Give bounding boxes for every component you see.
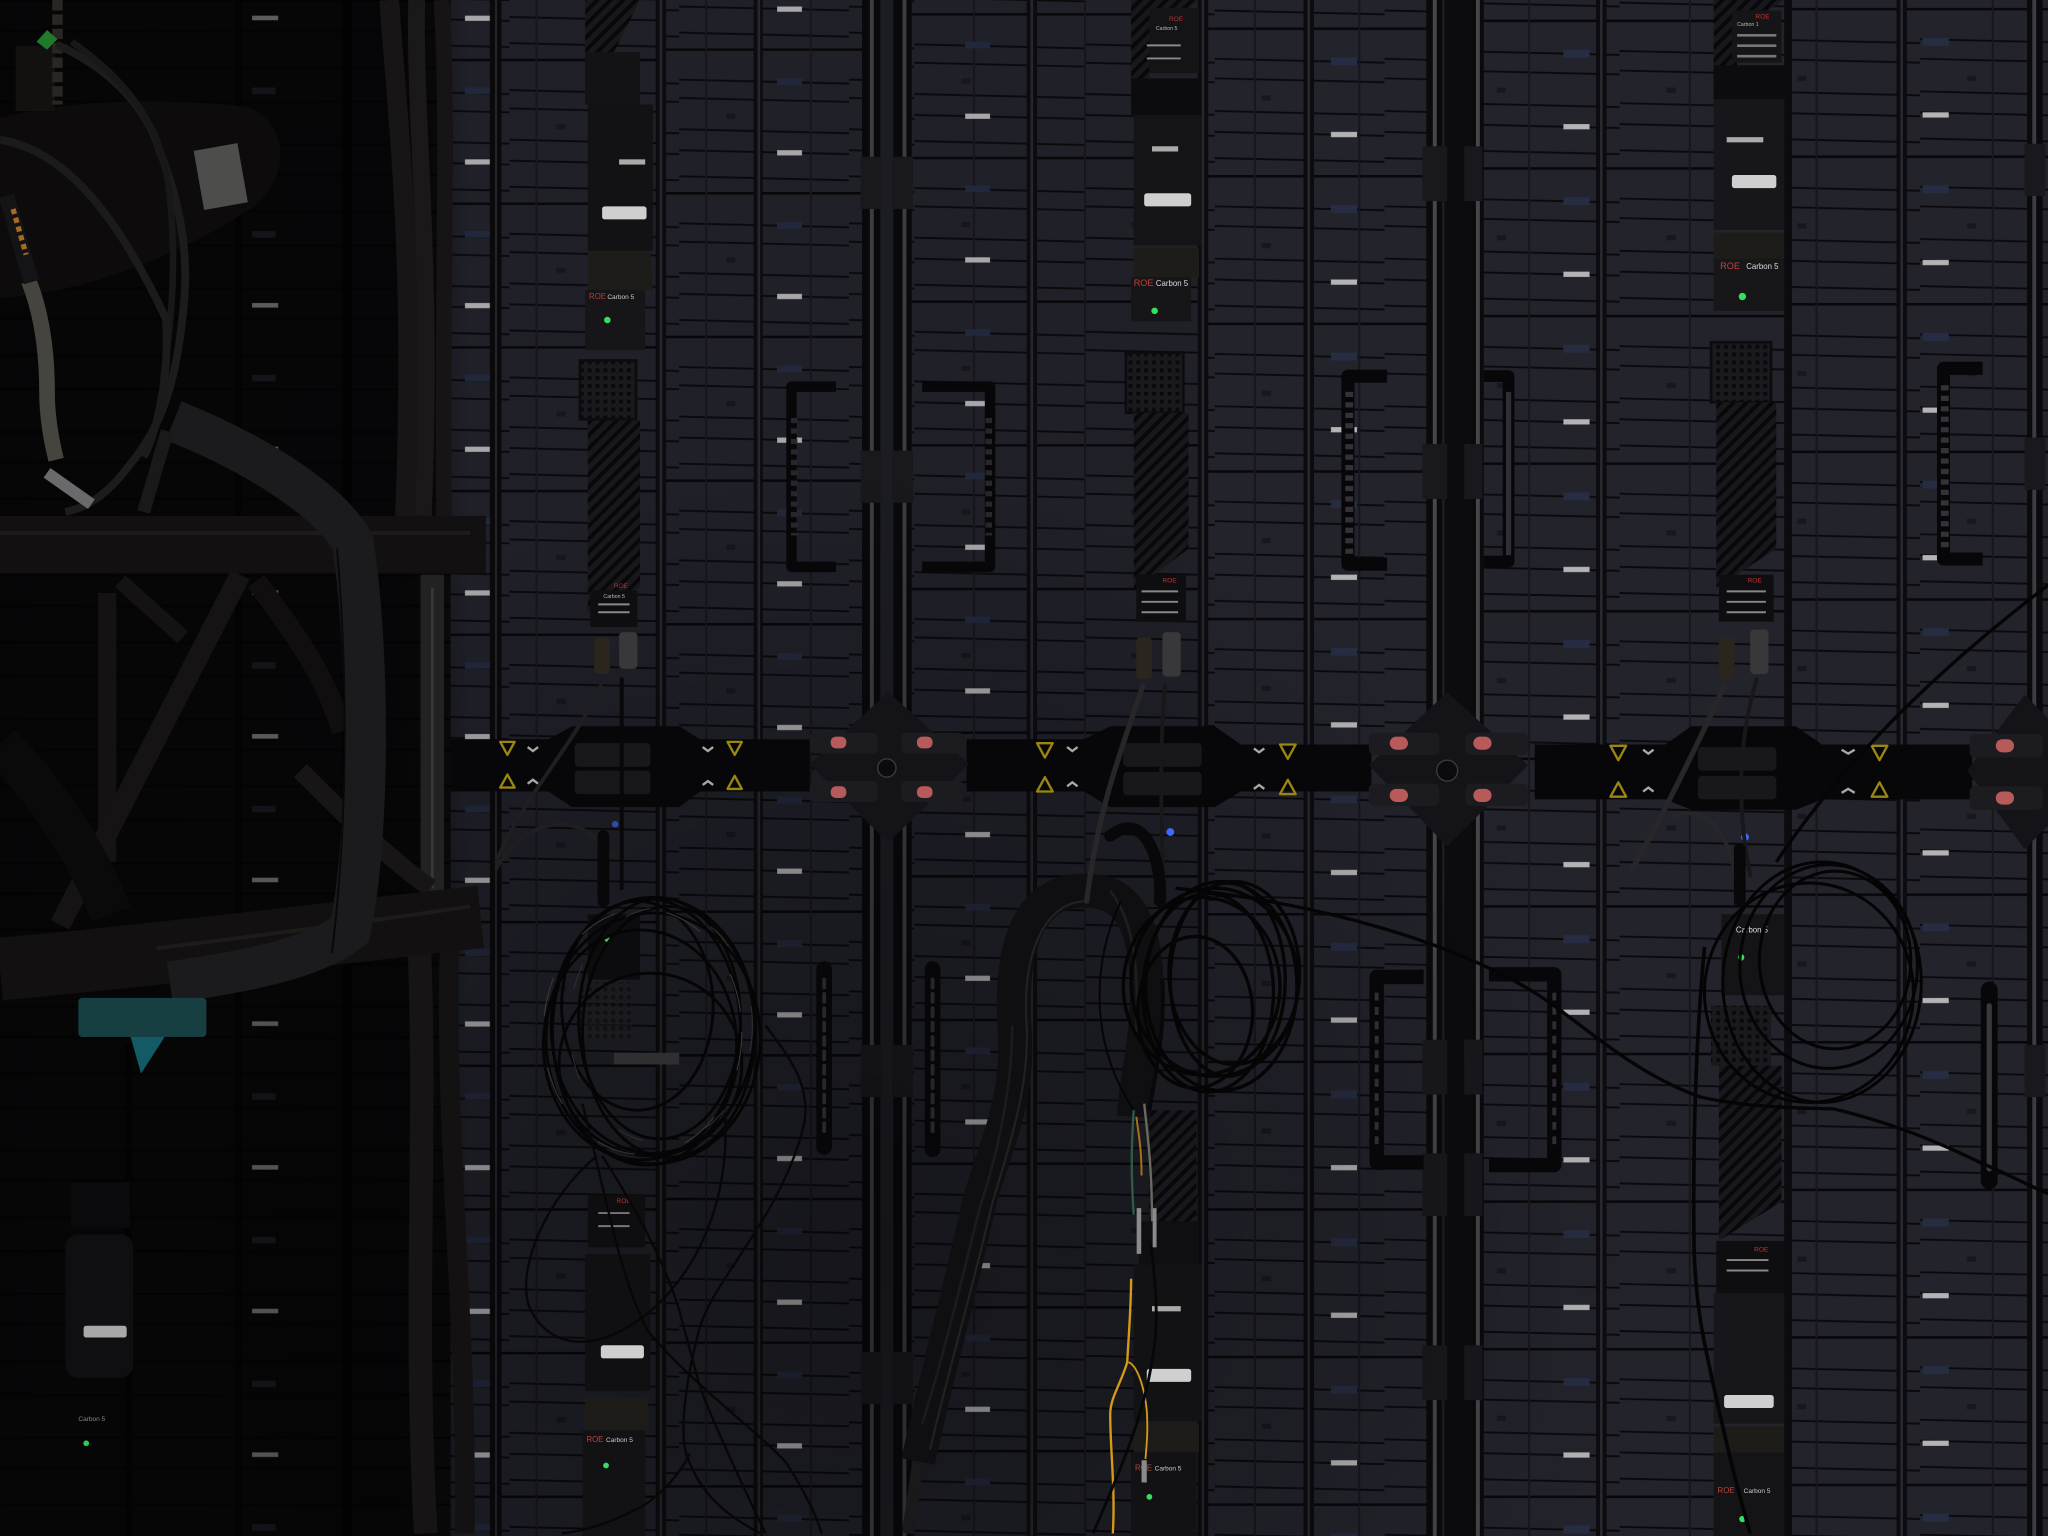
blue status lights [612, 821, 1749, 841]
processor column 2 [1126, 0, 1202, 622]
processor column 2: ROE [1134, 278, 1153, 288]
latch cross 3 [1967, 695, 2048, 849]
processor column 3 lower: ROE [1754, 1246, 1769, 1253]
grey power cables from connectors [496, 679, 1757, 901]
handle pair: upper left [792, 387, 990, 567]
black cables around hoist [0, 42, 185, 512]
vertical hanging cables [389, 0, 465, 1533]
processor column 3 lower: Carbon 5 [1744, 1488, 1771, 1495]
grey cable with orange tape [7, 196, 91, 504]
processor column 1: ROE [614, 583, 629, 590]
processor column 1: Carbon 5 [603, 594, 625, 600]
processor column 3: ROE [1748, 578, 1762, 585]
truss [0, 533, 486, 969]
teal tag on truss [78, 998, 206, 1074]
handle pair: upper centre [1348, 376, 1509, 564]
latch cross 1 [810, 692, 969, 842]
latch cross 2 [1369, 692, 1528, 846]
cable coil right [1704, 862, 1921, 1102]
connector block [594, 630, 1768, 679]
processor column 3 lower: Carbon 5 [1736, 926, 1769, 935]
processor column 1 lower: ROE [586, 1435, 603, 1444]
cable coil left [543, 897, 760, 1165]
vertical rails [490, 0, 2043, 1536]
loose wires under left coil [526, 1025, 822, 1533]
long loose cables [1176, 585, 2048, 1533]
rail brackets [861, 144, 2045, 1404]
processor column 3: Carbon 5 [1746, 262, 1779, 271]
processor column 2 lower: Carbon 5 [1155, 1466, 1182, 1473]
horizontal joining bars [451, 726, 1972, 810]
processor column 3 lower: ROE [1718, 1486, 1735, 1495]
ratchet strap [170, 421, 365, 982]
processor column 0 lower left [65, 1182, 133, 1446]
processor column 1 [580, 0, 653, 627]
white chevrons [528, 747, 1855, 793]
processor column 1 lower [577, 914, 650, 1536]
dark left section of wall [0, 0, 470, 1536]
fibre breakout with coloured strands [1093, 1104, 1156, 1533]
cable coil centre [1100, 882, 1300, 1110]
processor column 2 lower: ROE [1135, 1464, 1152, 1473]
processor column 1 lower: ROE [616, 1198, 631, 1205]
processor column 3 lower [1711, 914, 1784, 1536]
processor column 2: Carbon 5 [1156, 279, 1189, 288]
processor column 1: ROE [589, 292, 606, 301]
processor column 1: Carbon 5 [607, 294, 635, 301]
processor column 2 lower [1131, 1110, 1202, 1536]
thin vertical panel seams [536, 0, 1994, 1536]
coil tie tag [614, 1053, 679, 1064]
processor column 0 lower left: Carbon 5 [78, 1416, 106, 1423]
handle pair: lower centre [1377, 974, 1554, 1165]
green tape marker [37, 30, 57, 50]
processor column 2: ROE [1162, 578, 1177, 585]
thick cable bundle arch [908, 891, 1163, 1533]
mounting plates on bars [575, 743, 1776, 799]
handle pair: lower left [824, 969, 933, 1149]
yellow warning triangles [500, 742, 1887, 797]
processor column 3: ROE [1755, 13, 1770, 20]
processor column 2: Carbon 5 [1156, 26, 1177, 32]
processor column 3: ROE [1720, 261, 1740, 271]
processor column 1 lower: Carbon 5 [606, 1437, 633, 1444]
handle: lower right [1983, 990, 1996, 1181]
processor column 3 [1711, 0, 1784, 622]
processor column 2: ROE [1169, 16, 1184, 23]
motor hoist with label [0, 0, 280, 298]
processor column 3: Carbon 1 [1737, 22, 1759, 28]
handle: upper right [1944, 368, 1983, 559]
